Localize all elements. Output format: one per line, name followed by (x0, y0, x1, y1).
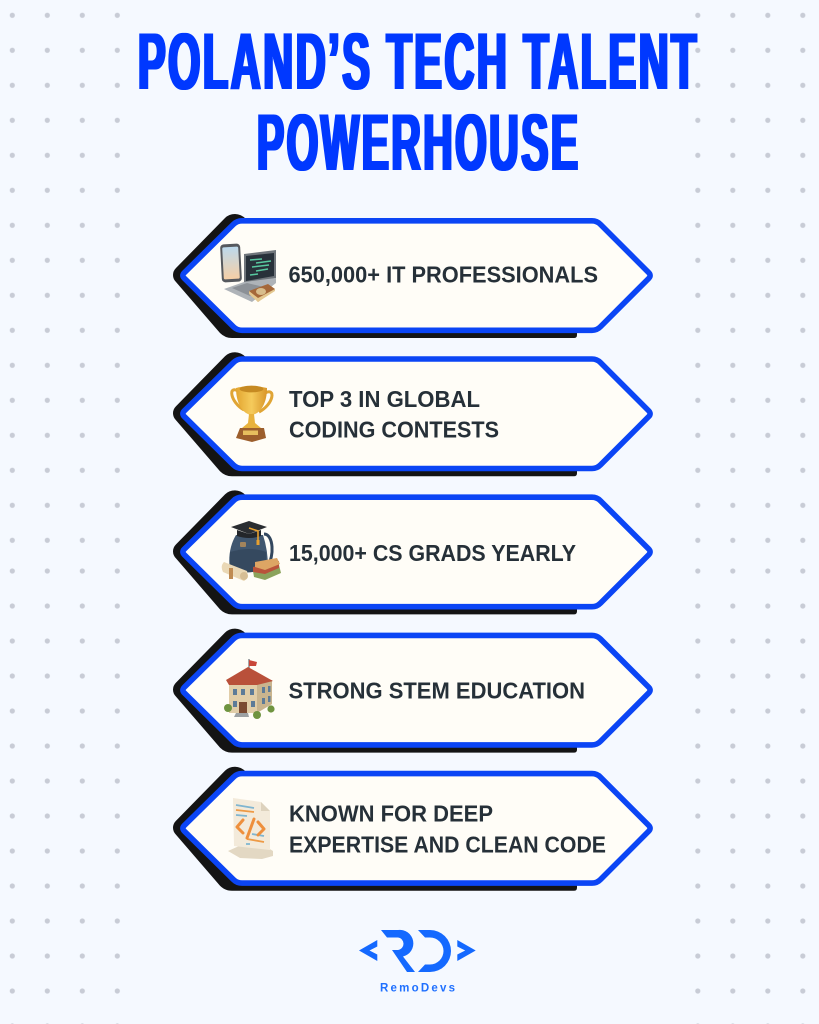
panel: top 3 in global coding contests: CODING CONTESTS (289, 417, 499, 443)
panel: 650,000+ IT professionals (173, 214, 650, 338)
label: STRONG STEM EDUCATION (288, 677, 585, 703)
icon: RD monogram with chevrons (359, 930, 476, 972)
brand name: RemoDevs (380, 983, 455, 995)
icon: trophy (232, 386, 272, 442)
panel: strong STEM education (173, 629, 650, 753)
panel: top 3 in global coding contests (173, 352, 650, 476)
logo: RemoDevs (359, 930, 476, 995)
panel: deep expertise and clean code: EXPERTISE AND CLEAN CODE (289, 831, 606, 857)
icon: phone, laptop and book (220, 244, 276, 302)
panel: deep expertise and clean code (173, 767, 650, 891)
icon: code document (228, 798, 273, 859)
icon: backpack, graduation cap, scroll and books (222, 521, 281, 581)
label: 15,000+ CS GRADS YEARLY (289, 540, 576, 566)
label: 650,000+ IT PROFESSIONALS (288, 261, 598, 287)
panel: 15,000+ CS grads yearly (173, 490, 650, 614)
label: KNOWN FOR DEEP (289, 801, 493, 827)
label: TOP 3 IN GLOBAL (289, 386, 480, 412)
icon: school building (224, 659, 275, 719)
title (138, 17, 699, 188)
